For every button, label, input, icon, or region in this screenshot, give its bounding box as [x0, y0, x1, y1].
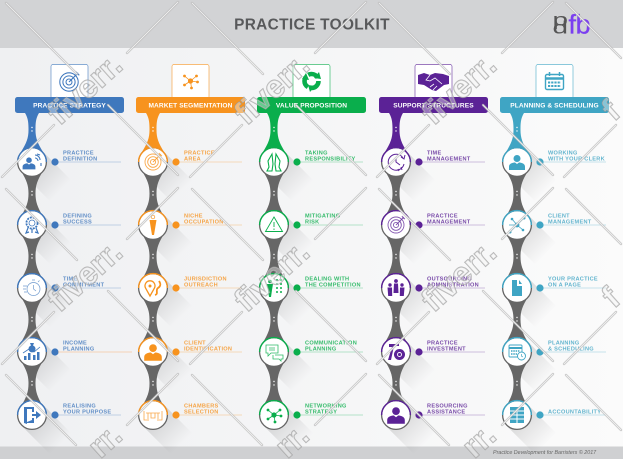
item: client management — [503, 211, 606, 239]
item: taking responsibility — [260, 148, 363, 176]
banner: practice strategy: PRACTICE STRATEGY — [33, 102, 106, 109]
footer credit: Practice Development for Barristers © 2017 — [493, 449, 597, 456]
item: communication planning — [260, 338, 363, 366]
logo: d — [552, 17, 568, 37]
label: PRACTICE — [427, 341, 458, 347]
item: defining success — [18, 211, 121, 239]
label: CLIENT — [548, 214, 570, 220]
label: ON A PAGE — [548, 283, 581, 289]
icon: map pin and path — [145, 281, 160, 296]
label: PLANNING — [548, 341, 579, 347]
banner: planning and scheduling — [500, 97, 609, 113]
label: DEFINITION — [63, 157, 98, 163]
item: time commitment — [18, 274, 121, 302]
banner: planning and scheduling: PLANNING & SCHEDULING — [510, 102, 599, 109]
label: WITH YOUR CLERK — [548, 157, 605, 163]
watermark logos: fiverr. — [414, 46, 503, 131]
label: OUTREACH — [184, 283, 218, 289]
label: COMMUNICATION — [305, 341, 357, 347]
label: TAKING — [305, 151, 328, 157]
label: RISK — [305, 220, 319, 226]
banner: value proposition: VALUE PROPOSITION — [276, 102, 347, 109]
label: ACCOUNTABILITY — [548, 410, 601, 416]
item: your practice on a page — [503, 274, 606, 302]
icon: clock with arrow — [388, 154, 405, 171]
column: market segmentation — [136, 64, 245, 455]
label: DEALING WITH — [305, 277, 349, 283]
banner: support structures — [379, 97, 488, 113]
label: RESOURCING — [427, 404, 468, 410]
item: time management — [382, 148, 485, 176]
watermark logos: fiverr. — [227, 46, 316, 131]
label: REALISING — [63, 404, 96, 410]
label: IDENTIFICATION — [184, 347, 232, 353]
label: PRACTICE — [63, 151, 94, 157]
logo: p — [552, 9, 568, 29]
label: MANAGEMENT — [427, 220, 471, 226]
label: TIME — [427, 151, 441, 157]
label: JURISDICTION — [184, 277, 227, 283]
icon: assistant bust — [387, 407, 405, 424]
icon: stopwatch — [23, 280, 40, 296]
icon: spreadsheet grid — [510, 407, 524, 423]
item: practice management — [382, 211, 485, 239]
item: jurisdiction outreach — [139, 274, 242, 302]
icon box: target — [51, 64, 88, 98]
label: YOUR PRACTICE — [548, 277, 598, 283]
label: WORKING — [548, 151, 578, 157]
watermark logos: fiverr. — [414, 233, 503, 318]
label: ASSISTANCE — [427, 410, 465, 416]
label: MANAGEMENT — [427, 157, 471, 163]
item: dealing with the competition — [260, 274, 363, 302]
banner: practice strategy — [15, 97, 124, 113]
icon: person and target — [23, 154, 41, 169]
label: PLANNING — [305, 347, 336, 353]
icon: speech bubbles — [266, 345, 283, 361]
label: OUTSOURCING — [427, 277, 472, 283]
label: INVESTMENT — [427, 347, 466, 353]
icon box: recycle — [293, 64, 330, 98]
icon: client bust — [144, 344, 162, 361]
label: SELECTION — [184, 410, 219, 416]
title: PRACTICE TOOLKIT — [234, 16, 390, 34]
label: RESPONSIBILITY — [305, 157, 356, 163]
label: OCCUPATION — [184, 220, 224, 226]
banner: market segmentation: MARKET SEGMENTATION — [148, 102, 233, 109]
icon: calendar with clock — [509, 345, 526, 360]
column: value proposition — [257, 64, 366, 455]
label: YOUR PURPOSE — [63, 410, 111, 416]
watermark logos: fiverr. — [40, 46, 129, 131]
icon: person with checklist — [267, 280, 282, 297]
icon: three people — [388, 279, 404, 296]
icon: network — [267, 409, 282, 423]
label: THE COMPETITION — [305, 283, 361, 289]
item: niche occupation — [139, 211, 242, 239]
icon: award gear — [26, 217, 38, 233]
item: practice investment — [382, 338, 485, 366]
item: chambers selection — [139, 401, 242, 429]
header band — [0, 0, 623, 48]
icon: money bag and chart — [23, 343, 40, 360]
banner: support structures: SUPPORT STRUCTURES — [393, 102, 474, 109]
icon box: network — [172, 64, 209, 98]
icon: standing person — [150, 215, 156, 235]
label: NICHE — [184, 214, 203, 220]
label: NETWORKING — [305, 404, 347, 410]
label: CLIENT — [184, 341, 206, 347]
icon: warning triangle — [266, 217, 282, 232]
icon box: handshake — [415, 64, 452, 98]
label: CHAMBERS — [184, 404, 219, 410]
column: planning and scheduling — [500, 64, 609, 455]
icon box: calendar — [536, 64, 573, 98]
label: MANAGEMENT — [548, 220, 592, 226]
item: accountability — [503, 401, 606, 429]
icon: diagonal network — [508, 216, 526, 234]
banner: market segmentation — [136, 97, 245, 113]
item: practice definition — [18, 148, 121, 176]
item: resourcing assistance — [382, 401, 485, 429]
item: realising your purpose — [18, 401, 121, 429]
logo — [552, 9, 590, 40]
column: support structures — [379, 64, 488, 455]
icon: stack with euro coin — [388, 344, 405, 360]
label: DEFINING — [63, 214, 92, 220]
logo: fb — [568, 10, 590, 40]
column: practice strategy — [15, 64, 132, 455]
label: PRACTICE — [427, 214, 458, 220]
watermark logos: fiverr. — [227, 233, 316, 318]
watermark logos: fiverr. — [40, 233, 129, 318]
item: outsourcing administration — [382, 274, 485, 302]
label: ADMINISTRATION — [427, 283, 479, 289]
item: income planning — [18, 338, 132, 366]
label: PLANNING — [63, 347, 94, 353]
icon: chambers desks — [144, 411, 162, 421]
item: client identification — [139, 338, 242, 366]
banner: value proposition — [257, 97, 366, 113]
item: mitigating risk — [260, 211, 363, 239]
label: INCOME — [63, 341, 87, 347]
item: networking strategy — [260, 401, 363, 429]
icon: document — [512, 280, 522, 296]
item: practice area — [139, 148, 242, 176]
label: STRATEGY — [305, 410, 337, 416]
icon: raised hands — [267, 154, 281, 171]
label: & SCHEDULING — [548, 347, 594, 353]
icon: clerk bust — [509, 155, 525, 170]
icon: door with arrow — [24, 407, 41, 424]
label: PRACTICE — [184, 151, 215, 157]
footer band — [0, 446, 623, 459]
item: planning and scheduling — [503, 338, 606, 366]
icon: target — [145, 153, 162, 170]
label: SUCCESS — [63, 220, 92, 226]
item: working with your clerk — [503, 148, 606, 176]
icon: target — [388, 216, 405, 233]
label: AREA — [184, 157, 201, 163]
label: MITIGATING — [305, 214, 340, 220]
label: TIME — [63, 277, 77, 283]
label: COMMITMENT — [63, 283, 105, 289]
